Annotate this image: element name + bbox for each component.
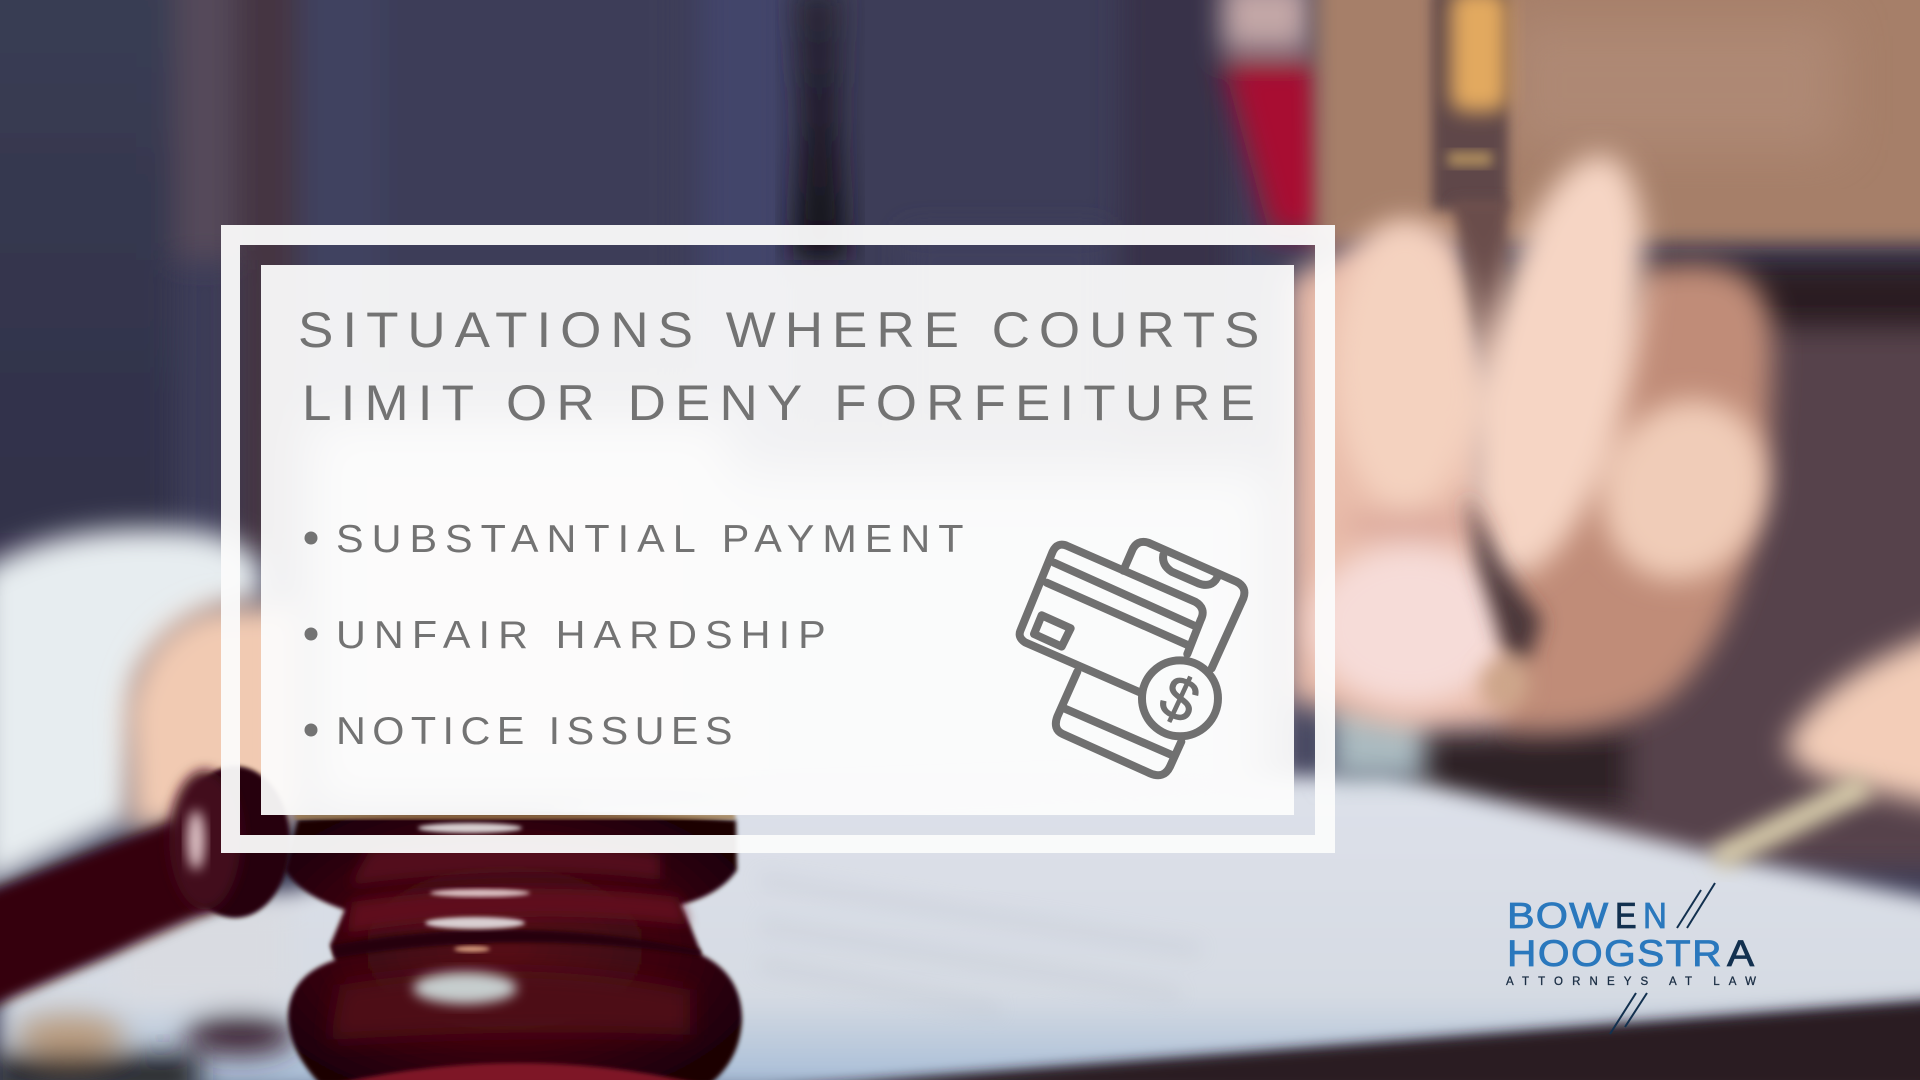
title: situations where courts limit or deny forfeiture: [298, 301, 1259, 431]
dollar sign: $: [1150, 661, 1209, 737]
logo: Bowen Hoogstra Attorneys at Law: [1506, 883, 1756, 1034]
logo slashes: [1610, 883, 1715, 1034]
document text lines: [760, 880, 1200, 1010]
bullet: notice issues: NOTICE ISSUES: [336, 709, 732, 753]
icon: credit card and phone with dollar coin: [1020, 542, 1244, 775]
title: situations where courts limit or deny forfeiture: LIMIT OR DENY FORFEITURE: [302, 374, 1255, 431]
left hand skin: [125, 605, 300, 830]
bullet list of situations: [304, 517, 964, 753]
pen lower shaft and tip: [1465, 490, 1542, 708]
pen: [1432, 0, 1508, 365]
gavel handle: [0, 766, 290, 1012]
main translucent text panel: [261, 265, 1294, 815]
scraps lower left: [0, 900, 295, 1080]
signing hand base: [1288, 233, 1772, 732]
fingers: [1310, 139, 1796, 705]
logo tagline: ATTORNEYS AT LAW: [1506, 976, 1756, 988]
logo wordmark line one: [1507, 896, 1667, 936]
logo wordmark line one: E: [1615, 896, 1637, 936]
tan jacket: [1315, 0, 1920, 245]
title: situations where courts limit or deny forfeiture: SITUATIONS WHERE COURTS: [298, 301, 1259, 358]
dark wall behind hand: [1400, 262, 1920, 870]
gavel head: [285, 812, 742, 1080]
logo wordmark line one: N: [1643, 897, 1667, 936]
outer translucent frame: [221, 225, 1335, 853]
blue-grey object beside hand: [1330, 695, 1425, 780]
second hand at right: [1785, 625, 1920, 810]
paper document: [0, 773, 1920, 1080]
logo wordmark line two: HOOGSTR: [1507, 934, 1722, 975]
bullet: unfair hardship: UNFAIR HARDSHIP: [336, 613, 826, 657]
red tie and highlight: [1222, 0, 1330, 235]
logo final letter: A: [1727, 934, 1754, 975]
shirt cuff: [0, 528, 262, 890]
hidden glass and paper under the panel: [310, 420, 1270, 830]
bullet: substantial payment: SUBSTANTIAL PAYMENT: [336, 517, 964, 561]
logo wordmark line one: BOW: [1507, 896, 1609, 936]
second pen: [1715, 785, 1867, 860]
bottom dark edge: [760, 1000, 1920, 1080]
suit jacket folds: [0, 0, 1230, 600]
